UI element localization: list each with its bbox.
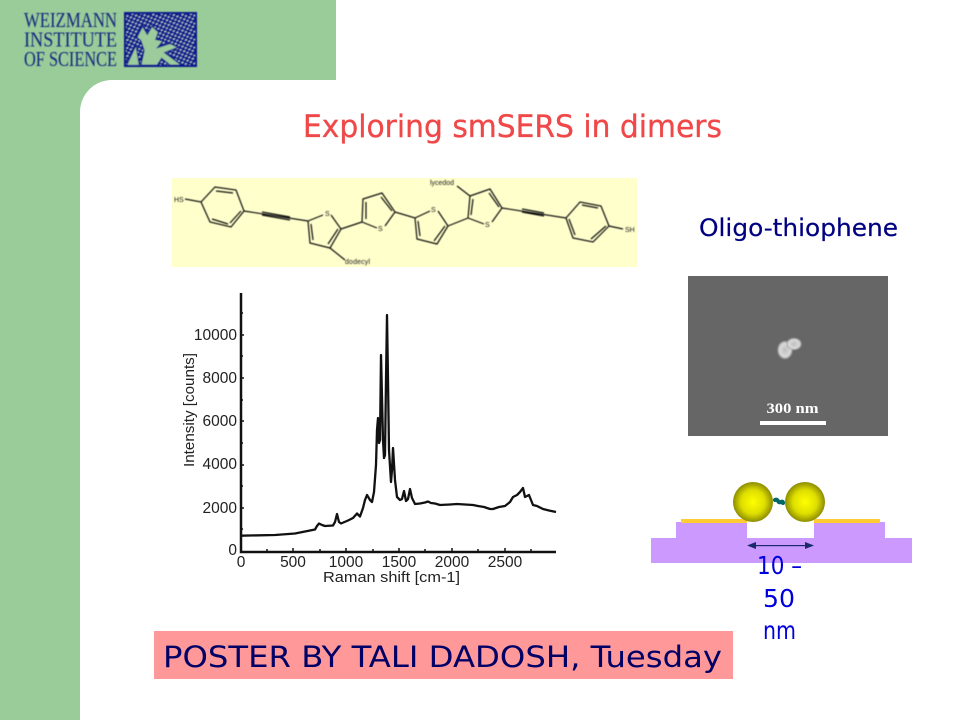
molecule structure panel xyxy=(172,178,637,267)
molecule name label: Oligo-thiophene xyxy=(699,214,898,242)
dimer particle xyxy=(778,338,802,359)
y axis tick labels: 2000 xyxy=(203,500,237,517)
y axis tick labels: 6000 xyxy=(203,413,237,430)
background frame: green band and sidebar xyxy=(0,0,336,720)
SEM micrograph xyxy=(688,276,888,436)
x axis tick labels: 1500 xyxy=(382,554,417,571)
molecule bonds xyxy=(185,186,623,260)
title: Exploring smSERS in dimers xyxy=(303,109,722,145)
scale bar xyxy=(760,421,826,425)
electrodes xyxy=(681,519,747,523)
gap arrow xyxy=(747,542,814,549)
y axis tick labels: 0 xyxy=(228,542,237,559)
poster callout: POSTER BY TALI DADOSH, Tuesday xyxy=(163,640,722,674)
logo emblem: tree xyxy=(124,12,197,67)
substrate xyxy=(651,522,912,563)
logo wordmark xyxy=(24,8,117,71)
molecule atom labels: S xyxy=(378,226,383,233)
nanoparticle left xyxy=(733,482,773,522)
molecule atom labels: S xyxy=(485,222,490,229)
logo wordmark: INSTITUTE xyxy=(24,28,117,52)
y axis tick labels: 10000 xyxy=(194,327,237,344)
molecule atom labels: S xyxy=(431,207,436,214)
chart axes xyxy=(241,293,556,552)
logo: Weizmann Institute of Science xyxy=(24,8,197,71)
poster callout xyxy=(154,631,733,679)
spectrum line xyxy=(241,315,556,536)
nanoparticle right xyxy=(785,482,825,522)
molecule atom labels: S xyxy=(325,211,330,218)
logo wordmark: OF SCIENCE xyxy=(24,47,117,71)
gap size label: 10 – xyxy=(757,551,802,580)
x axis title: Raman shift [cm-1] xyxy=(323,570,460,586)
molecule atom labels: lycedod xyxy=(430,180,454,187)
x axis tick labels: 2500 xyxy=(488,554,523,571)
molecule atom labels xyxy=(174,180,635,266)
logo wordmark: WEIZMANN xyxy=(24,8,117,32)
gap size label xyxy=(757,551,802,645)
x axis tick labels xyxy=(237,554,523,571)
Raman spectrum chart xyxy=(182,293,556,586)
molecule atom labels: SH xyxy=(625,227,635,234)
y axis title: Intensity [counts] xyxy=(182,353,198,467)
y axis tick labels: 8000 xyxy=(203,370,237,387)
x axis tick labels: 1000 xyxy=(329,554,364,571)
molecule atom labels: dodecyl xyxy=(345,259,370,266)
x axis tick labels: 0 xyxy=(237,554,246,571)
x axis tick labels: 2000 xyxy=(435,554,470,571)
nanogap device diagram xyxy=(651,482,912,645)
y axis tick labels xyxy=(194,327,237,559)
scale label: 300 nm xyxy=(766,401,819,417)
y axis tick labels: 4000 xyxy=(203,456,237,473)
molecule atom labels: HS xyxy=(174,197,184,204)
gap size label: nm xyxy=(763,616,796,645)
gap size label: 50 xyxy=(763,584,795,613)
x axis tick labels: 500 xyxy=(280,554,306,571)
molecule bridge xyxy=(775,500,783,503)
